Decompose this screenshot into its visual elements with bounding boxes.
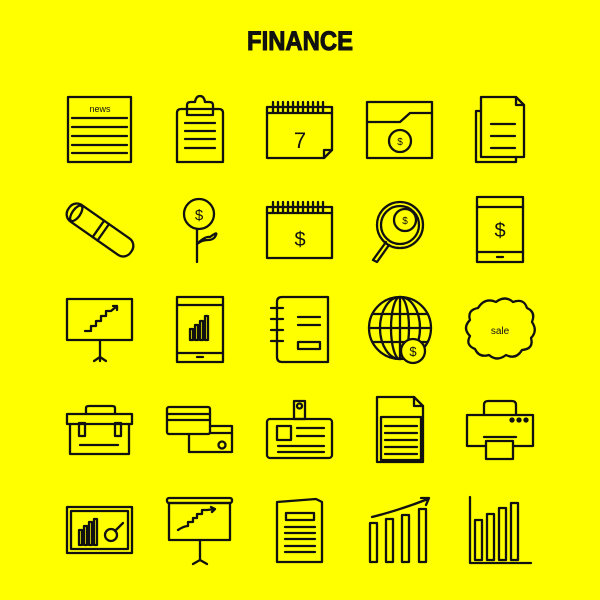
icon: framed chart (67, 507, 132, 553)
icon: calendar dollar: $ (294, 229, 306, 251)
icon: ID badge (267, 401, 332, 458)
icon: globe with coin: $ (409, 344, 417, 359)
icon: board with stairs (67, 299, 132, 361)
icon: growth bars (370, 498, 429, 562)
icon: calendar dollar (267, 202, 332, 258)
icon: folder with coin: $ (397, 137, 403, 148)
icon: magnifier coin (373, 202, 423, 262)
icon: calendar 7 (267, 102, 332, 158)
icon: folder with coin (367, 102, 432, 158)
icon: globe with coin (369, 297, 431, 363)
icon: briefcase (67, 406, 132, 454)
icon: newspaper (68, 97, 131, 162)
icon: document (377, 397, 423, 462)
icon: sale cloud: sale (491, 326, 510, 337)
icon: phone dollar (477, 197, 523, 262)
icon: notebook (271, 297, 328, 362)
icon: credit cards (167, 407, 232, 452)
icon: calendar 7: 7 (294, 128, 306, 153)
icon: presentation growth (167, 498, 232, 564)
icon: clipboard (177, 96, 223, 162)
icon: newspaper: news (89, 104, 111, 114)
icon: documents (476, 97, 524, 162)
title: FINANCE (247, 26, 353, 56)
icon: sale cloud (466, 298, 535, 358)
icon: money plant: $ (195, 207, 204, 224)
icon: rolled scroll (63, 200, 137, 260)
icon: magnifier coin: $ (402, 216, 408, 227)
icon: brochure (277, 499, 322, 562)
icon: phone dollar: $ (494, 220, 506, 242)
icon: bar chart (470, 497, 531, 563)
icon: printer (467, 401, 533, 459)
icon: money plant (184, 199, 216, 262)
icon: tablet chart (177, 297, 223, 362)
